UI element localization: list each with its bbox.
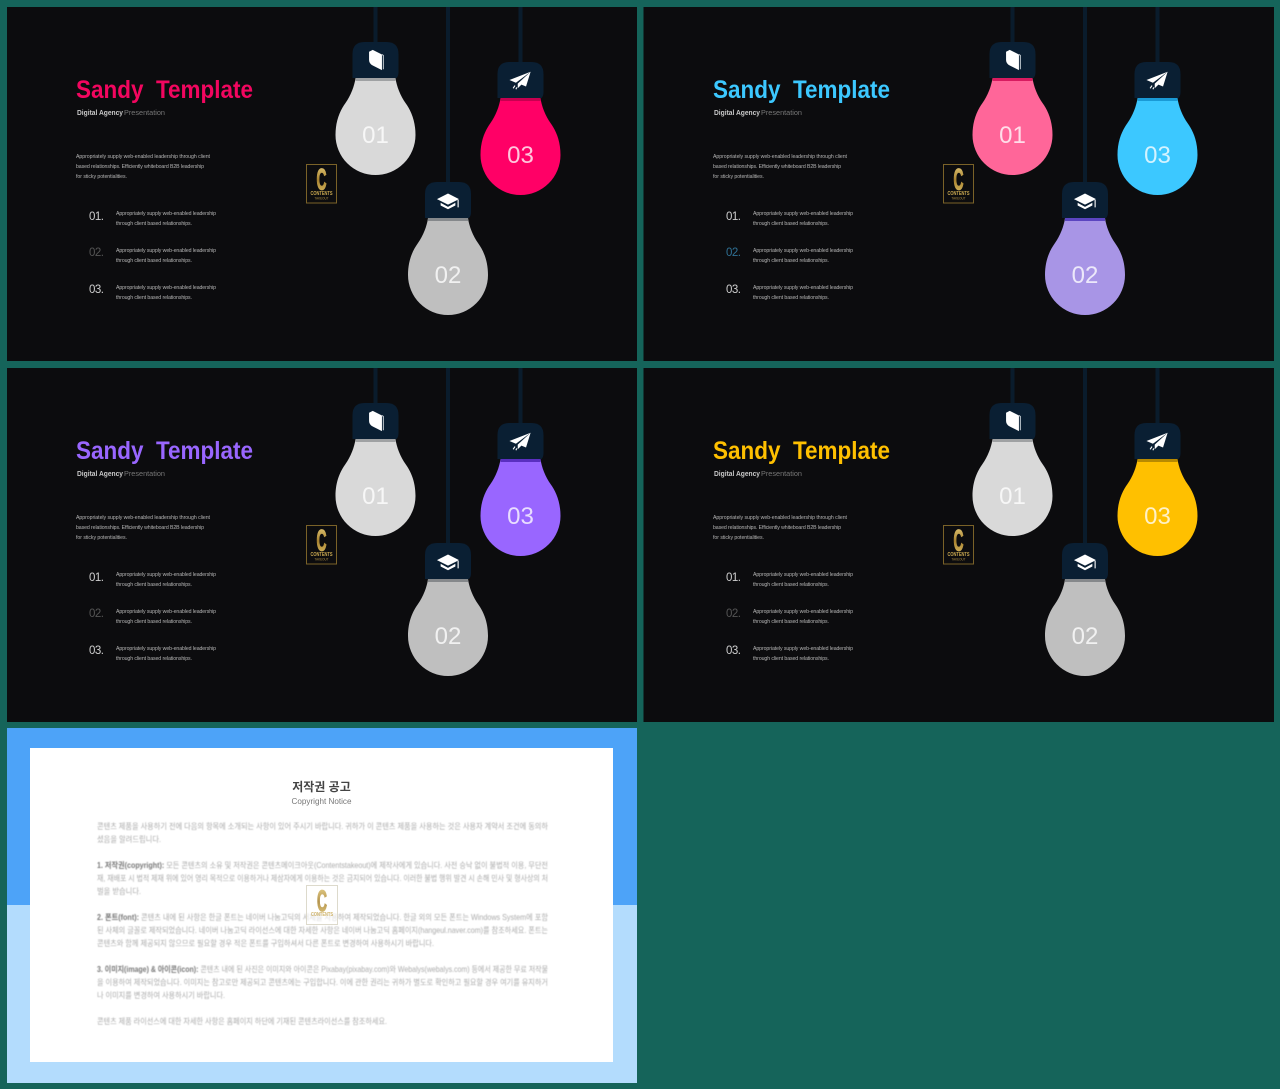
list item 02: Appropriately supply web-enabled leadership <box>116 248 216 254</box>
list item 02 <box>726 247 853 264</box>
list item 01: 01. <box>726 211 741 223</box>
list item 01: 01. <box>89 572 104 584</box>
list item 02: through client based relationships. <box>116 258 192 264</box>
subtitle: Presentation <box>761 108 802 117</box>
subtitle: Presentation <box>124 108 165 117</box>
list item 01 <box>726 211 853 227</box>
logo: TAKEOUT <box>952 196 966 200</box>
list item 01: 01. <box>726 572 741 584</box>
logo <box>306 524 336 564</box>
panel: purple template slide <box>7 368 637 722</box>
list item 03 <box>89 645 216 662</box>
bulb 02 <box>1045 368 1125 676</box>
notice body text: 콘텐츠와 함께 제공되지 않으므로 필요할 경우 적은 폰트를 구입하셔서 다른 폰트로 변경하여 사용하시기 바랍니다. <box>97 938 434 948</box>
list item 02 <box>726 608 853 625</box>
subtitle: Digital Agency <box>714 469 761 478</box>
list item 03: 03. <box>89 284 104 296</box>
bulb 03 <box>1118 368 1198 556</box>
logo watermark: CONTENTS <box>311 912 334 918</box>
subtitle <box>77 108 165 117</box>
bulb 03: 03 <box>507 503 534 530</box>
list item 02 <box>89 247 216 264</box>
logo watermark <box>306 885 338 924</box>
list item 01 <box>89 211 216 227</box>
bulb 03: 03 <box>1144 503 1171 530</box>
panel: blue template slide <box>644 7 1274 361</box>
list item 02: 02. <box>89 247 104 259</box>
subtitle: Presentation <box>761 469 802 478</box>
bulb 03 <box>480 368 560 556</box>
intro text: based relationships. Efficiently whiteboard B2B leadership <box>76 525 204 531</box>
bulb 03: 03 <box>1144 142 1171 169</box>
subtitle: Digital Agency <box>77 108 124 117</box>
bulb 01 <box>336 368 416 536</box>
list item 03: Appropriately supply web-enabled leadership <box>753 285 853 291</box>
list item 03: through client based relationships. <box>116 295 192 301</box>
list item 03: 03. <box>726 284 741 296</box>
list item 02: Appropriately supply web-enabled leadership <box>753 609 853 615</box>
list item 03: 03. <box>89 645 104 657</box>
notice body text: 재, 재배포 시 법적 제재 위에 있어 영리 목적으로 이용하거나 제삼자에게 이용하는 것은 금지되어 있습니다. 이러한 불법 행위 발견 시 손해 민사 및 형사상의 처 <box>97 873 548 883</box>
bulb 03: 03 <box>507 142 534 169</box>
list item 03: through client based relationships. <box>116 656 192 662</box>
logo: TAKEOUT <box>314 196 329 200</box>
logo: CONTENTS <box>948 191 970 197</box>
logo: CONTENTS <box>310 552 333 558</box>
list item 01: through client based relationships. <box>753 582 829 588</box>
list item 03 <box>726 645 853 662</box>
list item 01: Appropriately supply web-enabled leadership <box>753 211 853 217</box>
logo <box>944 164 974 203</box>
list item 01 <box>726 572 853 588</box>
list item 01: through client based relationships. <box>753 221 829 227</box>
notice body text: 된 사체의 글꼴로 제작되었습니다. 네이버 나눔고딕 라이선스에 대한 자세한 사항은 네이버 나눔고딕 홈페이지(hangeul.naver.com)를 참조하세요. 폰트는 <box>97 925 548 935</box>
intro text: based relationships. Efficiently whiteboard B2B leadership <box>713 525 841 531</box>
intro text <box>76 515 211 541</box>
logo: C <box>316 164 326 196</box>
list item 02: 02. <box>726 608 741 620</box>
logo: C <box>954 524 964 558</box>
notice body text: 을 이용하여 제작되었습니다. 이미지는 참고로만 제공되고 콘텐츠에는 구입합니다. 이에 관한 권리는 귀하가 별도로 확인하고 필요할 경우 여기를 유지하거 <box>97 977 548 987</box>
list item 01: through client based relationships. <box>116 582 192 588</box>
list item 02: through client based relationships. <box>753 619 829 625</box>
notice body text: 셨음을 알려드립니다. <box>97 834 161 844</box>
bulb 01 <box>972 368 1052 536</box>
panel: yellow template slide <box>644 368 1274 722</box>
intro text: based relationships. Efficiently whiteboard B2B leadership <box>76 164 204 170</box>
bulb 01: 01 <box>362 122 389 149</box>
bulb 01 <box>972 7 1052 175</box>
notice body text: 콘텐츠 제품 라이선스에 대한 자세한 사항은 홈페이지 하단에 기재된 콘텐츠라이선스를 참조하세요. <box>97 1016 387 1026</box>
subtitle <box>714 108 802 117</box>
list item 01 <box>89 572 216 588</box>
logo: CONTENTS <box>310 191 333 197</box>
bulb 02 <box>1045 7 1125 315</box>
subtitle: Digital Agency <box>77 469 124 478</box>
intro text: Appropriately supply web-enabled leadership through client <box>713 154 848 160</box>
list item 01: through client based relationships. <box>116 221 192 227</box>
list item 01: Appropriately supply web-enabled leadership <box>116 572 216 578</box>
title: Sandy Template <box>713 76 890 104</box>
list item 02: 02. <box>726 247 741 259</box>
intro text: for sticky potentialities. <box>713 535 764 541</box>
bulb 01: 01 <box>999 483 1026 510</box>
title: Sandy Template <box>76 437 253 465</box>
subtitle <box>77 469 165 478</box>
intro text <box>76 154 211 180</box>
list item 02 <box>89 608 216 625</box>
notice body text: 1. 저작권(copyright): 모든 콘텐츠의 소유 및 저작권은 콘텐츠메이크아웃(Contentstakeout)에 제작사에게 있습니다. 사전 승낙 없이 불법적 이용, 무단전 <box>97 860 548 870</box>
intro text <box>713 154 848 180</box>
intro text: Appropriately supply web-enabled leadership through client <box>76 515 211 521</box>
intro text: Appropriately supply web-enabled leadership through client <box>76 154 211 160</box>
subtitle: Presentation <box>124 469 165 478</box>
list item 02: through client based relationships. <box>116 619 192 625</box>
list item 01: 01. <box>89 211 104 223</box>
list item 01: Appropriately supply web-enabled leadership <box>753 572 853 578</box>
list item 01: Appropriately supply web-enabled leadership <box>116 211 216 217</box>
bulb 02 <box>408 7 488 315</box>
list item 03 <box>726 284 853 301</box>
list item 03: 03. <box>726 645 741 657</box>
notice body text <box>97 821 548 1026</box>
bulb 02 <box>408 368 488 676</box>
list item 02: through client based relationships. <box>753 258 829 264</box>
bulb 02: 02 <box>1072 623 1098 650</box>
list item 02: 02. <box>89 608 104 620</box>
list item 03: Appropriately supply web-enabled leadership <box>116 646 216 652</box>
intro text: Appropriately supply web-enabled leadership through client <box>713 515 848 521</box>
logo: C <box>954 164 964 196</box>
bulb 01: 01 <box>362 483 389 510</box>
bulb 03 <box>480 7 560 195</box>
intro text: based relationships. Efficiently whiteboard B2B leadership <box>713 164 841 170</box>
notice body text: 콘텐츠 제품을 사용하기 전에 다음의 항목에 소개되는 사항이 있어 주시기 바랍니다. 귀하가 이 콘텐츠 제품을 사용하는 것은 사용자 계약서 조건에 동의하 <box>97 821 548 831</box>
list item 03: Appropriately supply web-enabled leadership <box>116 285 216 291</box>
notice body text: 나 이미지를 변경하여 사용하시기 바랍니다. <box>97 990 225 1000</box>
intro text: for sticky potentialities. <box>76 174 127 180</box>
intro text: for sticky potentialities. <box>76 535 127 541</box>
panel: red template slide <box>7 7 637 361</box>
bulb 02: 02 <box>435 262 461 289</box>
title: Sandy Template <box>713 437 890 465</box>
logo: C <box>316 524 326 558</box>
list item 03: through client based relationships. <box>753 656 829 662</box>
list item 03: through client based relationships. <box>753 295 829 301</box>
subtitle: Digital Agency <box>714 108 761 117</box>
bulb 02: 02 <box>435 623 461 650</box>
notice body text: 2. 폰트(font): 콘텐츠 내에 된 사항은 한글 폰트는 네이버 나눔고딕의 서체를 사용하여 제작되었습니다. 한글 외의 모든 폰트는 Windows System에 포함 <box>97 912 548 922</box>
notice subheading: Copyright Notice <box>292 796 352 806</box>
title: Sandy Template <box>76 76 253 104</box>
logo <box>306 164 336 203</box>
intro text: for sticky potentialities. <box>713 174 764 180</box>
logo <box>944 524 974 564</box>
panel: copyright notice <box>7 728 637 1083</box>
logo watermark: C <box>317 885 327 918</box>
list item 02: Appropriately supply web-enabled leadership <box>753 248 853 254</box>
bulb 01: 01 <box>999 122 1026 149</box>
list item 02: Appropriately supply web-enabled leadership <box>116 609 216 615</box>
logo: TAKEOUT <box>314 558 329 562</box>
list item 03 <box>89 284 216 301</box>
subtitle <box>714 469 802 478</box>
notice heading: 저작권 공고 <box>292 779 351 794</box>
bulb 03 <box>1118 7 1198 195</box>
list item 03: Appropriately supply web-enabled leadership <box>753 646 853 652</box>
notice body text: 3. 이미지(image) & 아이콘(icon): 콘텐츠 내에 된 사진은 이미지와 아이콘은 Pixabay(pixabay.com)와 Webalys(webalys.com) 등에서 제공한 무료 저작물 <box>97 964 548 974</box>
notice body text: 벌을 받습니다. <box>97 886 141 896</box>
intro text <box>713 515 848 541</box>
bulb 01 <box>336 7 416 175</box>
logo: TAKEOUT <box>952 558 966 562</box>
logo: CONTENTS <box>948 552 970 558</box>
bulb 02: 02 <box>1072 262 1098 289</box>
